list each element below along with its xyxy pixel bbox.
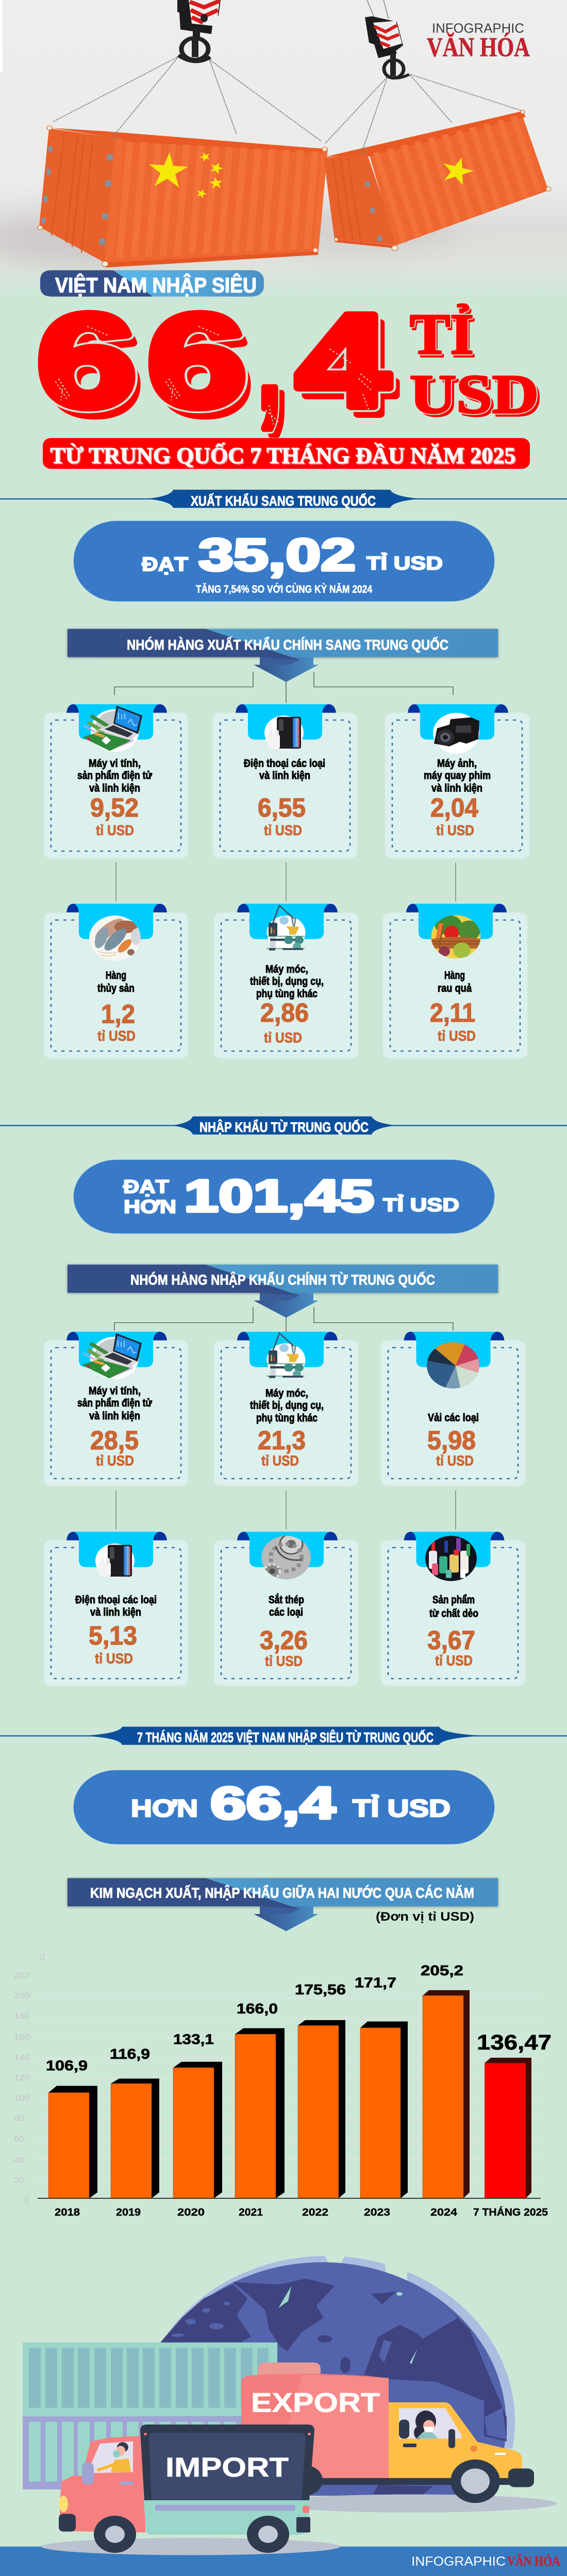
import card: điện thoại: và linh kiện — [90, 1606, 141, 1618]
import total pill: ĐẠT — [123, 1177, 169, 1197]
import card: máy móc: thiết bị, dụng cụ, — [250, 1399, 324, 1411]
export card: thủy sản — [44, 904, 188, 1058]
flag stars on left container — [147, 150, 225, 199]
import card: vải — [381, 1332, 525, 1486]
section banner: xuất khẩu: XUẤT KHẨU SANG TRUNG QUỐC — [191, 493, 376, 509]
export card: máy ảnh: tỉ USD — [436, 823, 474, 839]
icon: phone — [264, 716, 304, 750]
import card: vải: 5,98 — [427, 1426, 476, 1455]
header: nhóm hàng xuất khẩu with arrow: NHÓM HÀNG XUẤT KHẨU CHÍNH SANG TRUNG QUỐC — [127, 637, 448, 653]
export card: máy ảnh: và linh kiện — [431, 782, 482, 794]
export card: máy vi tính: và linh kiện — [89, 782, 140, 794]
footer logo: INFOGRAPHIC — [411, 2554, 506, 2568]
unit: tỉ: TỈ — [412, 306, 476, 370]
icon: steel gears — [261, 1534, 311, 1579]
bar 2020 — [173, 2032, 222, 2218]
icon: seafood — [89, 915, 141, 961]
bar 2023: 171,7 — [355, 1975, 396, 1991]
import card: máy móc: Máy móc, — [265, 1387, 308, 1399]
y axis labels: 202 — [14, 1971, 30, 1980]
icon: laptop — [82, 1333, 142, 1379]
illustration: import truck: IMPORT — [165, 2452, 289, 2482]
export card: máy ảnh: Máy ảnh, — [437, 757, 477, 769]
bar 2020: 133,1 — [173, 2032, 214, 2047]
import card: chất dẻo: từ chất dẻo — [429, 1607, 478, 1619]
bar 2020: 2020 — [177, 2206, 205, 2218]
bar 2024: 2024 — [430, 2206, 457, 2218]
export card: máy móc: 2,86 — [260, 998, 309, 1027]
bar 2019 — [110, 2046, 159, 2218]
export card: điện thoại: tỉ USD — [264, 823, 302, 839]
icon: fabric — [427, 1342, 479, 1388]
export card: máy móc — [214, 904, 358, 1058]
import total pill: HƠN — [124, 1197, 176, 1217]
digit shadows — [44, 295, 397, 443]
bar 2022: 2022 — [302, 2206, 328, 2218]
digits: 6 — [37, 287, 137, 435]
export card: điện thoại: 6,55 — [258, 793, 306, 822]
import card: sắt thép: 3,26 — [260, 1625, 308, 1655]
connectors: import — [114, 1307, 456, 1530]
digit shadows: , — [265, 295, 288, 442]
export card: rau quả: tỉ USD — [438, 1028, 476, 1044]
import total pill: 101,45 — [184, 1171, 374, 1221]
import card: điện thoại: 5,13 — [89, 1621, 137, 1650]
illustration: stacked containers — [23, 2343, 277, 2489]
trade deficit pill — [74, 1770, 494, 1844]
y axis labels: 60 — [14, 2134, 24, 2144]
y axis labels: 0 — [24, 2196, 29, 2205]
bar 2018: 2018 — [55, 2206, 80, 2218]
digits: 4 — [296, 287, 391, 435]
footer bar — [0, 2547, 567, 2576]
icon: laptop — [82, 705, 142, 752]
bar 2024: 205,2 — [421, 1963, 463, 1978]
import card: máy móc: tỉ USD — [261, 1453, 299, 1469]
digit mint outline: 6 — [37, 287, 137, 435]
trade deficit pill: HƠN — [131, 1794, 198, 1822]
bar 2023: 2023 — [364, 2206, 390, 2218]
section banner: nhập khẩu — [0, 1116, 567, 1134]
bar 2024 — [421, 1963, 470, 2218]
header: nhóm hàng nhập khẩu with arrow: NHÓM HÀNG NHẬP KHẨU CHÍNH TỪ TRUNG QUỐC — [130, 1272, 435, 1288]
icon: crane hook left — [177, 0, 221, 61]
bar 7 tháng 2025: 7 THÁNG 2025 — [473, 2206, 548, 2218]
header: nhóm hàng xuất khẩu with arrow — [68, 629, 498, 682]
digit mint outline: , — [258, 289, 281, 435]
import card: sắt thép: Sắt thép — [269, 1594, 304, 1606]
container left — [38, 126, 328, 267]
import card: máy vi tính: 28,5 — [90, 1426, 139, 1455]
container right — [324, 110, 551, 251]
headline number: 66,4 tỉ USD — [37, 287, 542, 443]
digits: , — [258, 289, 281, 435]
digit shadows: 4 — [304, 295, 397, 443]
export total pill: TĂNG 7,54% SO VỚI CÙNG KỲ NĂM 2024 — [196, 583, 372, 595]
export total pill — [74, 521, 494, 601]
kicker: Việt Nam nhập siêu — [40, 270, 264, 297]
chains — [53, 57, 523, 148]
section banner: xuất khẩu — [0, 490, 567, 509]
icon: machine — [266, 906, 305, 951]
import card: máy vi tính: Máy vi tính, — [89, 1385, 141, 1397]
bar 2021: 2021 — [239, 2206, 263, 2218]
logo: Infographic Văn Hóa — [427, 21, 530, 62]
unit note: (Đơn vị tỉ USD) — [376, 1910, 474, 1924]
driver: woman with mask — [414, 2411, 438, 2439]
import card: điện thoại — [44, 1532, 188, 1686]
unit: USD: USD — [410, 364, 539, 425]
export card: máy ảnh: máy quay phim — [424, 769, 491, 782]
driver: man with mask — [97, 2442, 131, 2472]
y axis labels: 120 — [14, 2073, 30, 2082]
logo: Infographic Văn Hóa: INFOGRAPHIC — [432, 21, 524, 36]
icon: crane hook right — [365, 0, 409, 78]
export card: điện thoại — [213, 704, 357, 858]
y axis labels — [14, 1953, 46, 2205]
export card: máy vi tính: tỉ USD — [96, 823, 134, 839]
y axis labels: 140 — [14, 2053, 30, 2062]
trade deficit pill: TỈ USD — [353, 1794, 451, 1822]
y axis labels: 40 — [14, 2156, 24, 2165]
illustration: globe — [138, 2256, 515, 2496]
trade deficit pill: 66,4 — [210, 1778, 336, 1828]
export card: rau quả: 2,11 — [430, 998, 475, 1027]
bar 2019: 2019 — [116, 2206, 141, 2218]
import card: máy móc — [214, 1332, 358, 1486]
bar 2021 — [235, 2001, 285, 2218]
y axis labels: 200 — [14, 1991, 30, 2000]
bar chart — [14, 1953, 552, 2218]
digit shadows: 6 — [154, 295, 252, 443]
illustration: export truck — [241, 2362, 534, 2503]
import card: máy móc: phụ tùng khác — [256, 1412, 318, 1424]
export card: thủy sản: 1,2 — [101, 999, 135, 1029]
import card: máy vi tính — [44, 1332, 188, 1486]
import card: vải: Vải các loại — [428, 1412, 479, 1423]
y axis labels: 20 — [14, 2176, 24, 2185]
export card: điện thoại: và linh kiện — [259, 769, 310, 782]
export card: thủy sản: Hàng — [106, 970, 126, 981]
bar 2018 — [46, 2058, 97, 2218]
export total pill: ĐẠT — [142, 553, 188, 575]
header: nhóm hàng nhập khẩu with arrow — [68, 1265, 498, 1318]
header: kim ngạch with arrow — [68, 1878, 498, 1931]
bar 2022: 175,56 — [295, 1982, 346, 1997]
export total pill: 35,02 — [198, 530, 356, 580]
import card: chất dẻo: tỉ USD — [435, 1653, 473, 1669]
export card: máy vi tính: Máy vi tính, — [89, 757, 141, 769]
export card: máy móc: thiết bị, dụng cụ, — [250, 975, 324, 987]
bar 2023 — [355, 1975, 408, 2218]
export card: máy móc: phụ tùng khác — [256, 988, 318, 999]
unit: tỉ: TỈ — [410, 302, 474, 367]
import card: điện thoại: tỉ USD — [95, 1651, 133, 1667]
digits — [37, 287, 391, 435]
import card: chất dẻo: Sản phẩm — [432, 1594, 475, 1606]
icon: phone — [95, 1544, 135, 1578]
bar 2022 — [295, 1982, 346, 2218]
digit mint outline: 4 — [296, 287, 391, 435]
import card: chất dẻo — [381, 1532, 525, 1686]
import card: chất dẻo: 3,67 — [427, 1625, 475, 1655]
distress speckles — [56, 327, 372, 424]
y axis labels: 180 — [14, 2011, 30, 2021]
bar 7 tháng 2025: 136,47 — [477, 2031, 552, 2055]
import card: máy vi tính: sản phẩm điện tử — [77, 1397, 152, 1409]
digits: 6 — [147, 287, 247, 435]
gridlines — [38, 1998, 541, 2179]
import total pill: TỈ USD — [383, 1194, 459, 1215]
export card: máy vi tính — [44, 704, 188, 858]
import card: sắt thép — [214, 1532, 358, 1686]
import card: máy móc: 21,3 — [258, 1426, 306, 1455]
illustration: export truck: EXPORT — [251, 2387, 380, 2418]
bar 2021: 166,0 — [237, 2001, 278, 2016]
import total pill — [74, 1160, 494, 1233]
section banner: nhập siêu — [0, 1727, 567, 1745]
export card: điện thoại: Điện thoại các loại — [244, 757, 325, 769]
y axis labels: 160 — [14, 2032, 30, 2042]
export card: máy vi tính: sản phẩm điện tử — [77, 769, 152, 782]
bar 2018: 106,9 — [46, 2058, 88, 2074]
y axis labels: 11 — [39, 1953, 46, 1962]
connectors: export — [114, 672, 456, 902]
export card: thủy sản: thủy sản — [97, 982, 135, 994]
export total pill: TỈ USD — [366, 553, 443, 574]
unit: USD: USD — [410, 364, 539, 425]
digit mint outline: 6 — [147, 287, 247, 435]
import card: vải: tỉ USD — [436, 1453, 474, 1469]
import card: điện thoại: Điện thoại các loại — [75, 1594, 157, 1606]
unit: USD: USD — [413, 367, 542, 428]
kicker: Việt Nam nhập siêu: VIỆT NAM NHẬP SIÊU — [55, 274, 257, 297]
import card: sắt thép: các loại — [269, 1606, 303, 1618]
export card: máy móc: Máy móc, — [265, 963, 308, 975]
icon: machine — [266, 1333, 305, 1378]
import card: máy vi tính: tỉ USD — [96, 1453, 134, 1469]
bar 7 tháng 2025 — [473, 2031, 552, 2218]
icon: vegetables — [429, 915, 483, 959]
icon: camera — [433, 713, 479, 754]
import card: máy vi tính: và linh kiện — [89, 1410, 140, 1421]
bar 2019: 116,9 — [110, 2046, 150, 2062]
footer logo — [411, 2554, 560, 2569]
ground shadow: export truck — [268, 2495, 557, 2513]
export card: rau quả — [383, 904, 527, 1058]
export card: máy ảnh — [385, 704, 529, 858]
import card: sắt thép: tỉ USD — [265, 1653, 303, 1669]
digit shadows: 6 — [44, 295, 142, 443]
export card: máy vi tính: 9,52 — [90, 793, 139, 822]
red subtitle bar: TỪ TRUNG QUỐC 7 THÁNG ĐẦU NĂM 2025 — [51, 444, 516, 469]
y axis labels: 80 — [14, 2114, 24, 2123]
export card: máy ảnh: 2,04 — [430, 793, 479, 822]
export card: rau quả: rau quả — [438, 982, 472, 994]
flag star on right container — [439, 154, 477, 187]
ground shadow: import truck — [41, 2538, 340, 2555]
hero: containers and cranes — [0, 0, 567, 295]
illustration: import truck — [59, 2425, 314, 2553]
section banner: nhập khẩu: NHẬP KHẨU TỪ TRUNG QUỐC — [199, 1120, 369, 1134]
export card: rau quả: Hàng — [444, 970, 465, 981]
export card: thủy sản: tỉ USD — [97, 1028, 136, 1044]
y axis labels: 100 — [14, 2094, 30, 2103]
unit: tỉ: TỈ — [410, 302, 474, 367]
red subtitle bar: TỪ TRUNG QUỐC 7 THÁNG ĐẦU NĂM 2025 — [50, 443, 515, 468]
export card: máy móc: tỉ USD — [264, 1030, 302, 1046]
digit mint outline — [37, 287, 391, 435]
icon: plastic bottles — [425, 1536, 477, 1581]
